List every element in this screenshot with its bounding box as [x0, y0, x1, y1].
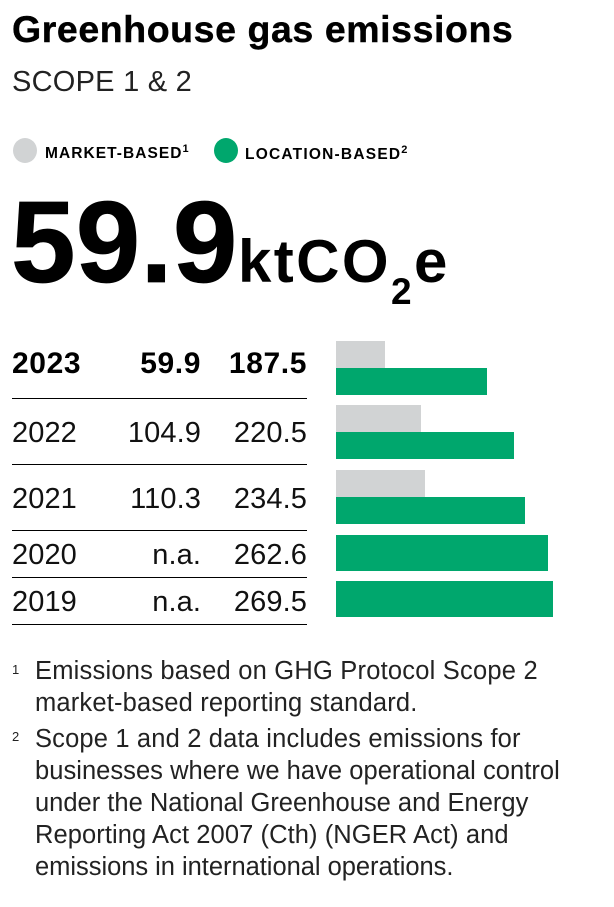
row 2023: 187.5 — [229, 347, 307, 380]
row 2022: 104.9 — [128, 417, 201, 449]
footnote 2 — [35, 725, 560, 881]
footnote 2: businesses where we have operational control — [35, 757, 560, 785]
footnote 2: under the National Greenhouse and Energy — [35, 789, 528, 817]
footnote 1 marker: 1 — [12, 662, 19, 677]
row 2021: 110.3 — [130, 483, 201, 515]
row 2020: 2020 — [12, 539, 77, 571]
footnote 2: emissions in international operations. — [35, 853, 453, 881]
legend — [13, 138, 407, 163]
legend: market-based swatch — [13, 138, 37, 163]
bar 2020 location — [336, 535, 548, 571]
bar 2023 location — [336, 368, 487, 395]
row 2019: n.a. — [152, 586, 201, 618]
footnote 2: Scope 1 and 2 data includes emissions for — [35, 725, 521, 753]
bar 2021 location — [336, 497, 525, 524]
headline number: 59.9 — [11, 177, 238, 307]
row 2019 — [12, 586, 307, 618]
legend: location-based label: LOCATION-BASED2 — [245, 144, 407, 163]
title: Greenhouse gas emissions — [12, 8, 513, 50]
row 2022: 220.5 — [234, 417, 307, 449]
legend: market-based label: MARKET-BASED1 — [45, 143, 189, 162]
row 2023: 2023 — [12, 347, 81, 380]
footnotes — [12, 657, 560, 881]
row 2021: 2021 — [12, 483, 77, 515]
bar 2021 market — [336, 470, 425, 497]
row 2019: 2019 — [12, 586, 77, 618]
row 2020 — [12, 539, 307, 571]
row 2020: 262.6 — [234, 539, 307, 571]
bar 2022 location — [336, 432, 514, 459]
headline unit suffix: e — [414, 228, 447, 295]
row 2022 — [12, 417, 307, 449]
row 2022: 2022 — [12, 417, 77, 449]
row 2021 — [12, 483, 307, 515]
footnote 2: Reporting Act 2007 (Cth) (NGER Act) and — [35, 821, 509, 849]
footnote 2 marker: 2 — [12, 729, 19, 744]
bar chart — [336, 341, 553, 617]
data table — [12, 347, 307, 625]
row 2020: n.a. — [152, 539, 201, 571]
footnote 1: market-based reporting standard. — [35, 689, 417, 717]
bar 2019 location — [336, 581, 553, 617]
bar 2023 market — [336, 341, 385, 368]
footnote 1 — [35, 657, 538, 717]
row 2019: 269.5 — [234, 586, 307, 618]
headline figure — [11, 177, 447, 312]
headline unit subscript: 2 — [391, 271, 412, 312]
footnote 1: Emissions based on GHG Protocol Scope 2 — [35, 657, 538, 685]
headline unit: ktCO — [238, 228, 391, 295]
row 2023 — [12, 347, 307, 380]
legend: location-based swatch — [214, 138, 238, 163]
bar 2022 market — [336, 405, 421, 432]
row 2023: 59.9 — [140, 347, 201, 380]
subtitle: SCOPE 1 & 2 — [12, 66, 192, 98]
row 2021: 234.5 — [234, 483, 307, 515]
